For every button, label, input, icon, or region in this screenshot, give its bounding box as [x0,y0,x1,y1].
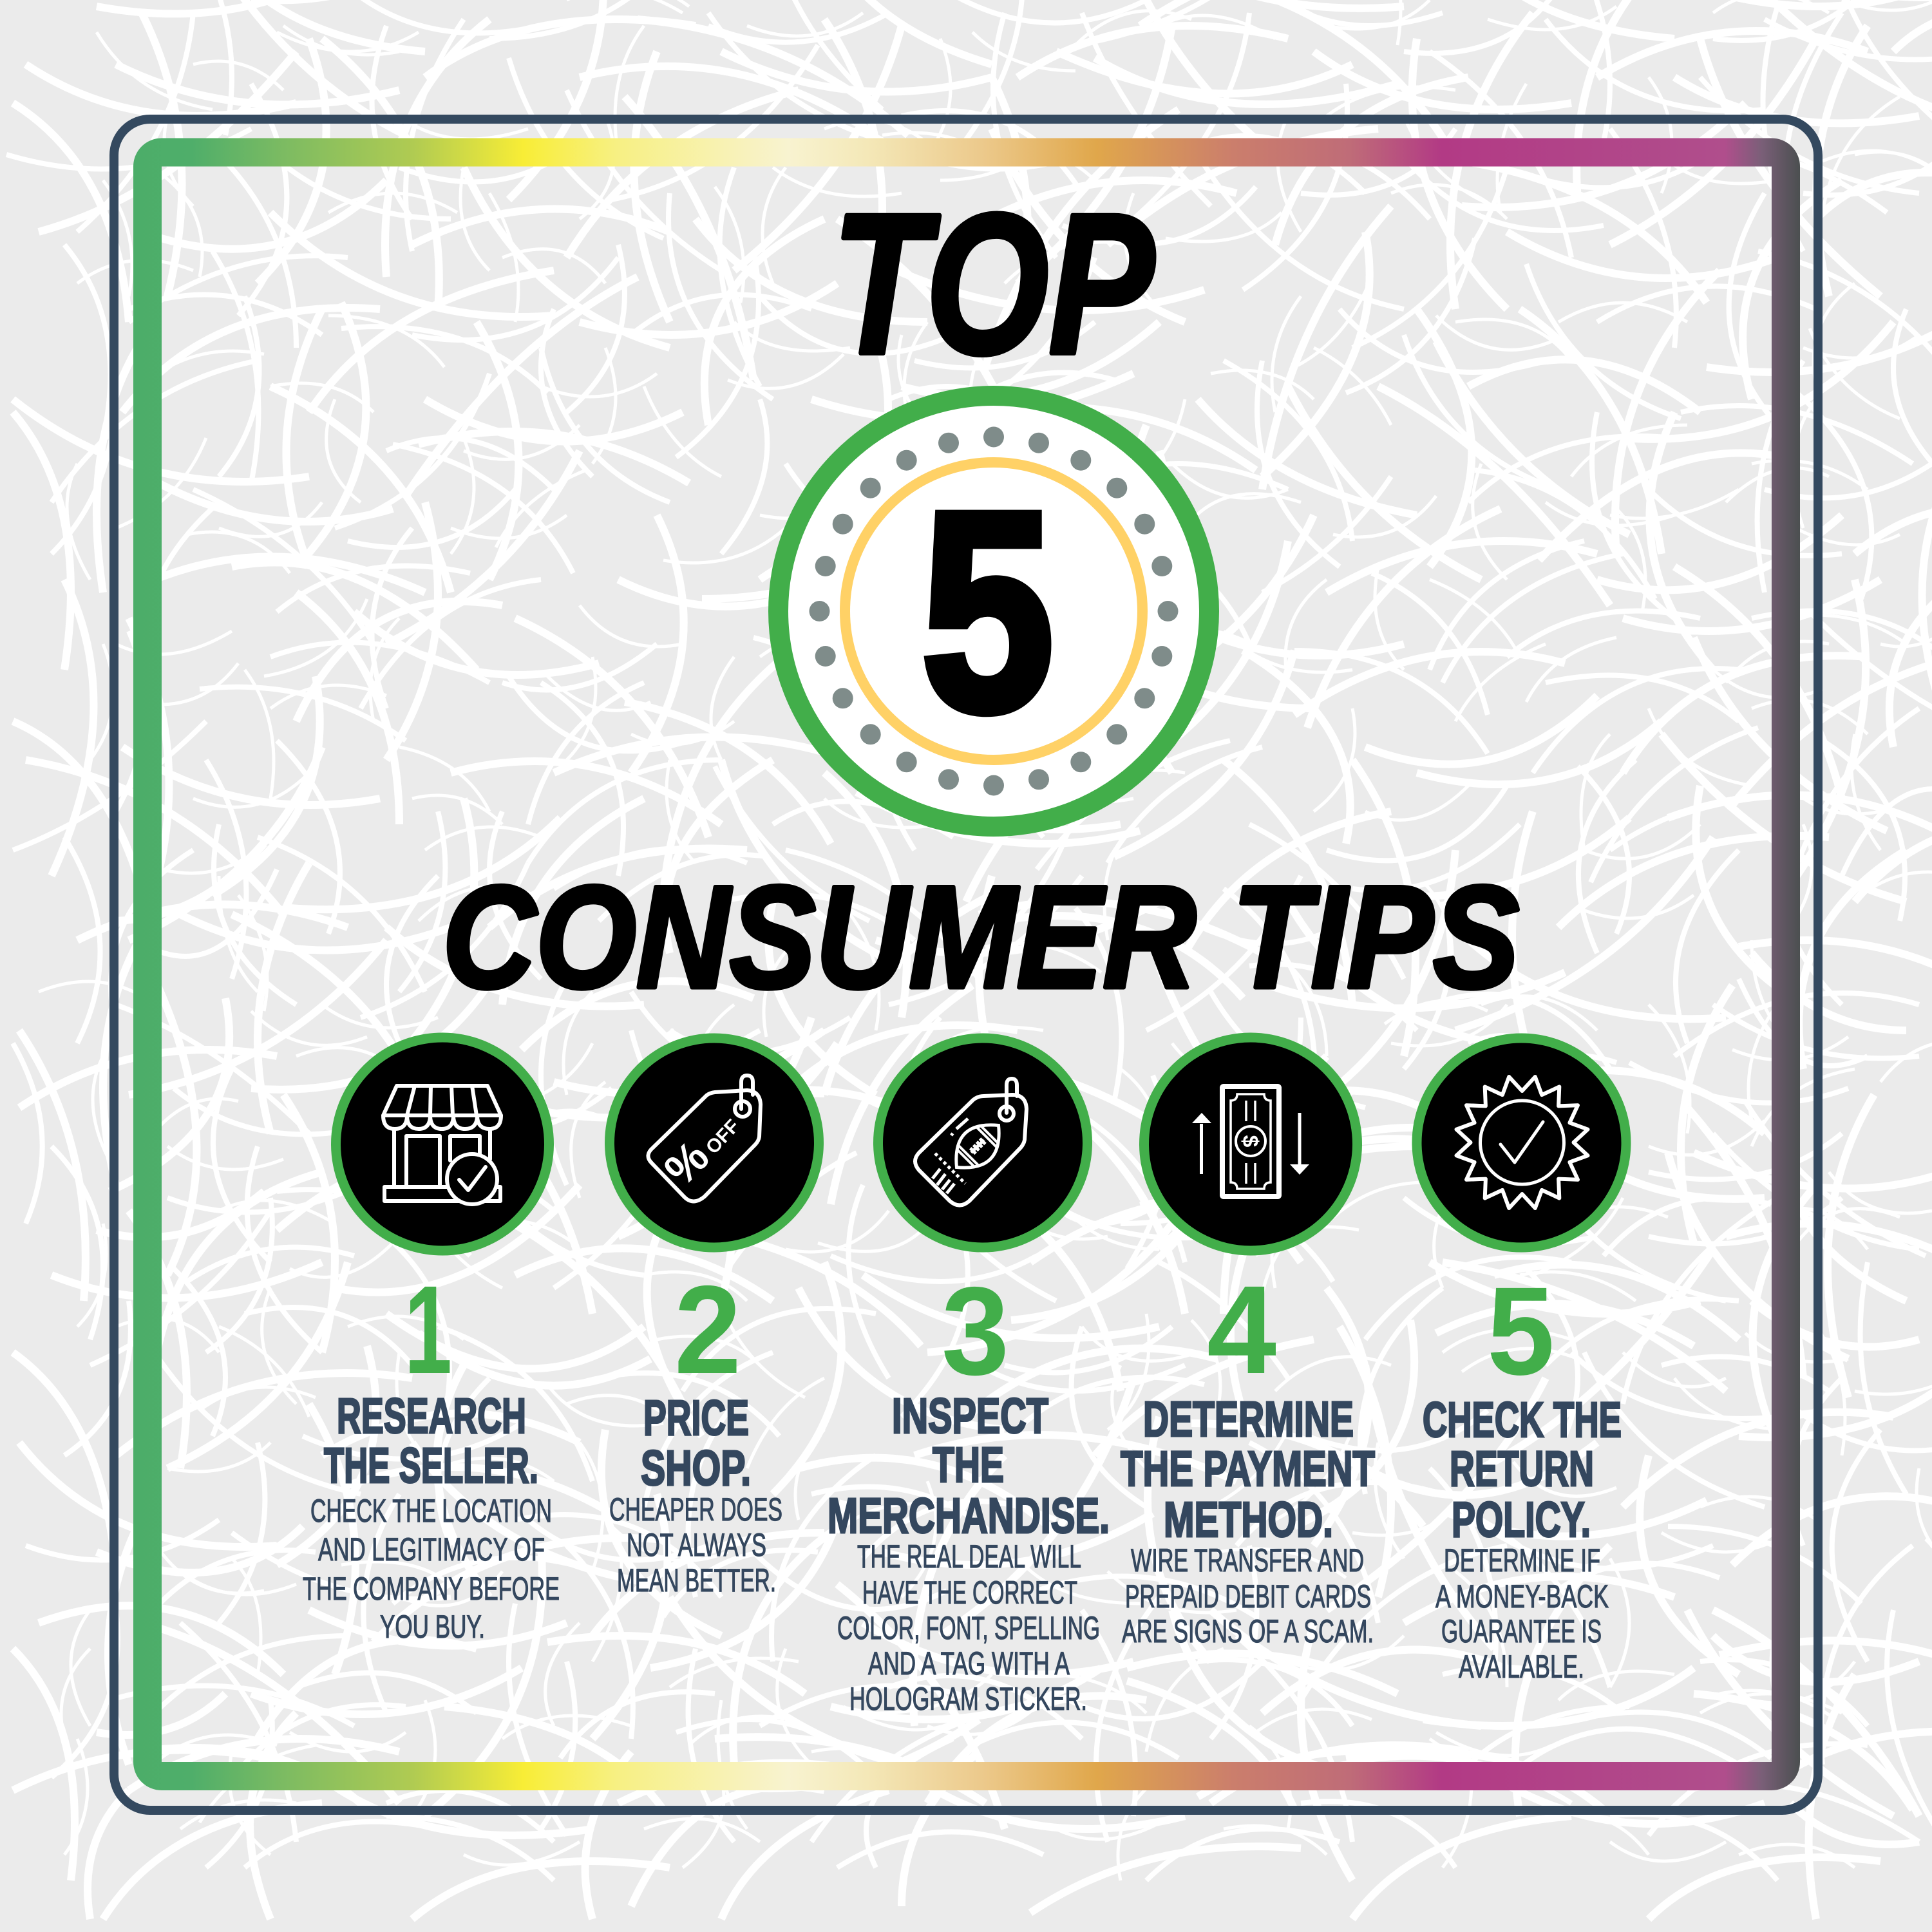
body: WIRE TRANSFER AND [1131,1542,1364,1578]
heading: RESEARCH [337,1388,526,1444]
body: PREPAID DEBIT CARDS [1125,1578,1371,1615]
heading [828,1388,1110,1544]
body: CHECK THE LOCATION [310,1493,552,1529]
body: AND LEGITIMACY OF [318,1531,545,1567]
body: THE COMPANY BEFORE [303,1571,560,1607]
heading: POLICY. [1452,1492,1591,1548]
heading: THE SELLER. [324,1438,538,1493]
body: A MONEY-BACK [1435,1578,1609,1615]
heading: THE [933,1437,1004,1493]
heading: RETURN [1450,1441,1594,1497]
outer navy frame [114,119,1818,1810]
body: ARE SIGNS OF A SCAM. [1122,1613,1374,1649]
tip 5 [1423,1261,1622,1685]
title: CONSUMER TIPS: CONSUMER TIPS [442,855,1519,1018]
body: DETERMINE IF [1444,1542,1600,1578]
body [837,1539,1100,1717]
heading: CHECK THE [1423,1392,1622,1448]
icon 2: percent off tag: % [654,1131,719,1195]
body [1435,1542,1609,1685]
body: HAVE THE CORRECT [862,1575,1077,1611]
icon 1: storefront [336,1037,549,1251]
icon 4: money transfer: $ [1238,1135,1262,1148]
heading: SHOP. [641,1441,751,1496]
badge: big number 5 [778,395,1209,827]
heading: THE PAYMENT [1121,1441,1375,1497]
body: NOT ALWAYS [627,1527,766,1563]
numeral 5: 5 [1487,1261,1555,1401]
body: THE REAL DEAL WILL [857,1539,1081,1575]
body: HOLOGRAM STICKER. [849,1681,1087,1717]
body: CHEAPER DOES [609,1492,782,1528]
numeral 4: 4 [1207,1260,1276,1400]
heading: DETERMINE [1143,1392,1354,1447]
heading: METHOD. [1164,1492,1333,1548]
numeral 3: 3 [942,1261,1009,1401]
numeral 1: 1 [404,1260,452,1400]
icon 5: guarantee seal [1417,1038,1626,1247]
heading: INSPECT [892,1388,1048,1444]
tip 4 [1121,1260,1375,1649]
heading [324,1388,538,1493]
heading: MERCHANDISE. [828,1488,1110,1544]
body: COLOR, FONT, SPELLING [837,1610,1100,1646]
badge numeral: 5 [922,453,1054,769]
body: YOU BUY. [380,1609,485,1645]
tip 3 [828,1261,1110,1717]
heading [1121,1392,1375,1548]
body: AND A TAG WITH A [868,1645,1070,1681]
numeral 2: 2 [674,1260,741,1400]
body: GUARANTEE IS [1441,1613,1602,1649]
body: MEAN BETTER. [617,1562,776,1598]
heading: PRICE [643,1390,749,1446]
icon 4: money transfer [1144,1037,1358,1251]
badge outer green ring [778,395,1209,827]
body [609,1492,782,1598]
body [1122,1542,1374,1649]
icon 2: percent off tag: OFF [702,1115,744,1159]
body: AVAILABLE. [1459,1649,1584,1685]
badge dot ring [809,426,1179,796]
tip 2 [609,1260,782,1598]
badge yellow ring [845,462,1142,760]
heading [1423,1392,1622,1548]
icon 2: percent off tag [609,1038,819,1247]
heading [641,1390,751,1496]
title: TOP: TOP [832,172,1155,395]
icon 3: football hologram tag [878,1038,1087,1247]
body [303,1493,560,1645]
inner gradient frame [147,152,1786,1776]
tip 1 [303,1260,560,1645]
